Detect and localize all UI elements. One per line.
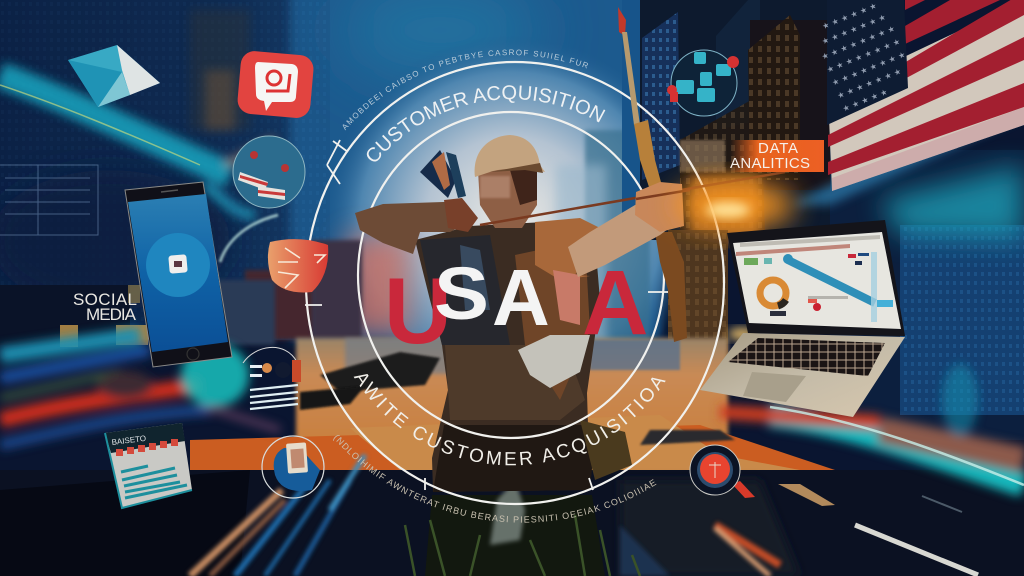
ground [296, 338, 728, 443]
bow lower limb [655, 232, 687, 342]
label: data analytics [730, 140, 824, 172]
text: USA letters: A [582, 252, 648, 354]
dark chest [420, 235, 510, 345]
hoodie lower [433, 425, 596, 492]
label: social media [73, 290, 137, 324]
trackpad [743, 372, 806, 402]
label: social media: SOCIAL [73, 290, 137, 309]
bow hand [635, 182, 684, 232]
flag stars: ★★★★★★★★ [831, 49, 910, 88]
road [0, 470, 1024, 576]
feathers [420, 150, 466, 198]
screen [733, 232, 901, 329]
flag stars [810, 0, 920, 114]
back arm [355, 202, 470, 254]
icon: calendar card [105, 423, 192, 508]
laptop [700, 220, 905, 417]
flag stars: ★★★★★★★★ [820, 23, 899, 62]
scarf [518, 335, 590, 388]
phone app icon [168, 254, 188, 274]
torso [415, 222, 600, 492]
flag stars: ★★★★★★★ [836, 66, 905, 101]
archer body [405, 135, 640, 576]
text: small top arc: AMOBDEEI CAIBSO TO PEBTBYE CASROF SUIIEL FUR [342, 50, 588, 130]
flag stars: ★★★★★★ [821, 0, 881, 31]
grass blades [405, 515, 640, 576]
flag canton [827, 0, 908, 125]
text: USA letters: S [434, 252, 489, 335]
laptop base [700, 333, 905, 417]
stone boot [490, 480, 525, 545]
leather front [515, 240, 590, 400]
text: USA letters: A [492, 253, 550, 342]
flag stars: ★★★★★ [841, 86, 892, 114]
donut chart [760, 280, 786, 306]
text: small bottom arc: (NDLOIHIMIF AWNTERAT IRBU BERASI PIESNITI OEEIAK COLIOIIIAE [333, 435, 656, 523]
arrow line [480, 172, 785, 225]
yellow pack [580, 420, 632, 480]
circular ring frame [305, 62, 724, 504]
diagonal bar [788, 260, 875, 303]
drawing hand [444, 198, 478, 232]
text: USA letters: U [384, 258, 452, 363]
right buildings [640, 0, 830, 240]
road markings [778, 484, 978, 575]
keyboard [728, 338, 885, 376]
cap [475, 135, 545, 177]
icon: network circle [667, 50, 739, 116]
icon: diamond [68, 45, 160, 107]
left city [0, 0, 330, 340]
label: social media: MEDIA [86, 305, 137, 324]
text: customer acquisition top arc: CUSTOMER ACQUISITION [366, 85, 606, 162]
icon: calendar card: BAISETO [111, 434, 147, 447]
green chips [744, 258, 758, 265]
flag stars: ★★★★★★★★ [825, 36, 904, 75]
phone screen [128, 194, 228, 352]
phone speaker [161, 190, 178, 192]
icon: orange shield [268, 239, 328, 292]
archer arms [355, 150, 690, 277]
arrow fletching [618, 7, 626, 36]
bow and arrow [480, 7, 785, 342]
label: data analytics: ANALITICS [730, 155, 810, 172]
info board [0, 165, 98, 235]
glow at bow [675, 181, 795, 340]
shoulder sleeve [535, 218, 600, 280]
phone circle [146, 233, 210, 297]
phone home button [187, 348, 199, 360]
flag stars: ★★★★★★★ [821, 11, 890, 46]
label: data analytics: DATA [758, 140, 798, 157]
screen bezel [727, 220, 905, 336]
head [478, 165, 537, 228]
icon: red chat app [236, 50, 315, 119]
icon: document circle [262, 436, 324, 498]
arrow shaft [622, 32, 640, 125]
text: customer acquisition bottom arc: AWITE CUSTOMER ACQUISITIOA [354, 374, 666, 466]
smartphone [125, 182, 232, 367]
american flag [810, 0, 1024, 191]
legs and grass [425, 495, 605, 576]
vest [445, 345, 585, 420]
icon: magnifier target [690, 445, 755, 498]
icon: report list [243, 347, 301, 409]
right backdrop [830, 150, 1024, 440]
extended arm [568, 190, 680, 277]
icon: flag circle [233, 136, 305, 208]
bow upper limb [634, 120, 662, 190]
text: USA letters [384, 252, 648, 363]
